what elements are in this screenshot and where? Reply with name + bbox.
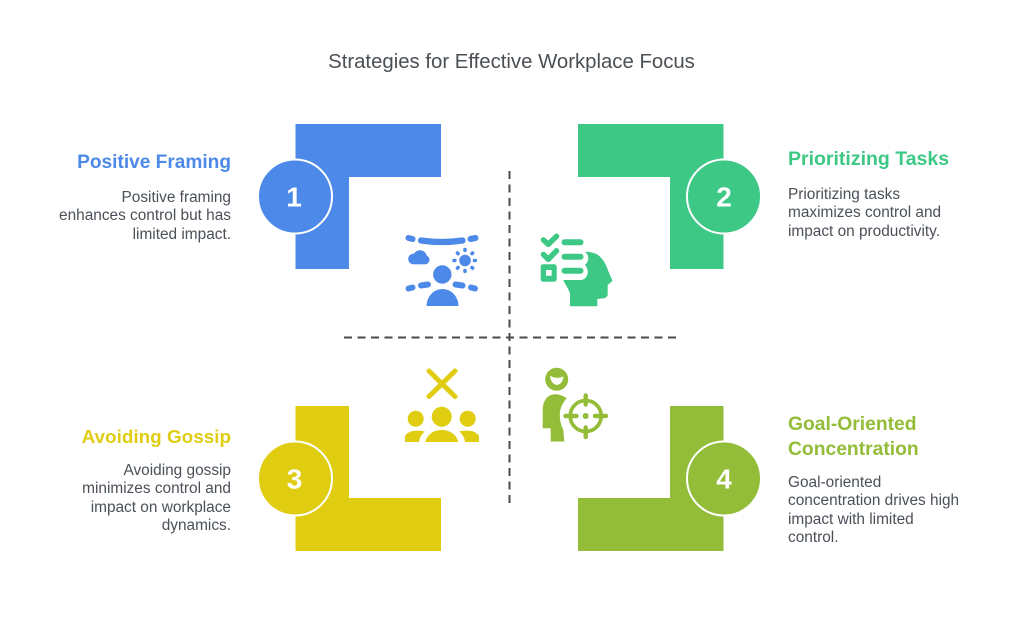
number badge 1 xyxy=(258,160,332,234)
number badge 1: 1 xyxy=(286,182,302,212)
number badge 4 xyxy=(687,442,761,516)
text: avoiding gossip: minimizes control and xyxy=(82,480,231,497)
number badge 3: 3 xyxy=(287,464,302,494)
heading: goal-oriented concentration: Goal-Oriented xyxy=(788,414,917,435)
text: prioritizing tasks: Prioritizing tasks xyxy=(788,186,900,203)
number badge 2 xyxy=(687,160,761,234)
heading: positive framing: Positive Framing xyxy=(77,152,231,173)
text: avoiding gossip: Avoiding gossip xyxy=(123,462,231,479)
panel: positive framing xyxy=(59,124,441,269)
L shape 4 xyxy=(578,406,724,551)
heading: goal-oriented concentration: Concentration xyxy=(788,439,919,460)
text: prioritizing tasks: maximizes control and xyxy=(788,204,941,221)
number badge 2: 2 xyxy=(716,182,732,212)
text: goal-oriented concentration: impact with limited xyxy=(788,511,914,528)
L shape 2 xyxy=(578,124,724,269)
icon: person with weather xyxy=(408,238,476,306)
icon: checklist head xyxy=(541,236,612,306)
text: positive framing: limited impact. xyxy=(133,226,231,243)
panel: goal-oriented concentration xyxy=(578,406,959,551)
number badge 4: 4 xyxy=(716,464,732,494)
L shape 1 xyxy=(296,124,441,269)
text: avoiding gossip: dynamics. xyxy=(162,517,231,534)
text: positive framing: Positive framing xyxy=(122,189,231,206)
heading: avoiding gossip: Avoiding Gossip xyxy=(82,427,231,448)
heading: prioritizing tasks: Prioritizing Tasks xyxy=(788,148,949,170)
text: avoiding gossip: impact on workplace xyxy=(91,499,231,516)
text: goal-oriented concentration: Goal-oriented xyxy=(788,474,881,491)
icon: group with cross xyxy=(405,371,479,442)
L shape 3 xyxy=(296,406,441,551)
text: positive framing: enhances control but has xyxy=(59,207,231,224)
icon: person with target xyxy=(543,368,606,442)
panel: prioritizing tasks xyxy=(578,124,949,269)
text: goal-oriented concentration: concentration drives high xyxy=(788,492,959,509)
title: Strategies for Effective Workplace Focus xyxy=(328,51,695,73)
text: goal-oriented concentration: control. xyxy=(788,529,838,546)
panel: avoiding gossip xyxy=(82,406,441,551)
text: prioritizing tasks: impact on productivity. xyxy=(788,223,940,240)
number badge 3 xyxy=(258,442,332,516)
